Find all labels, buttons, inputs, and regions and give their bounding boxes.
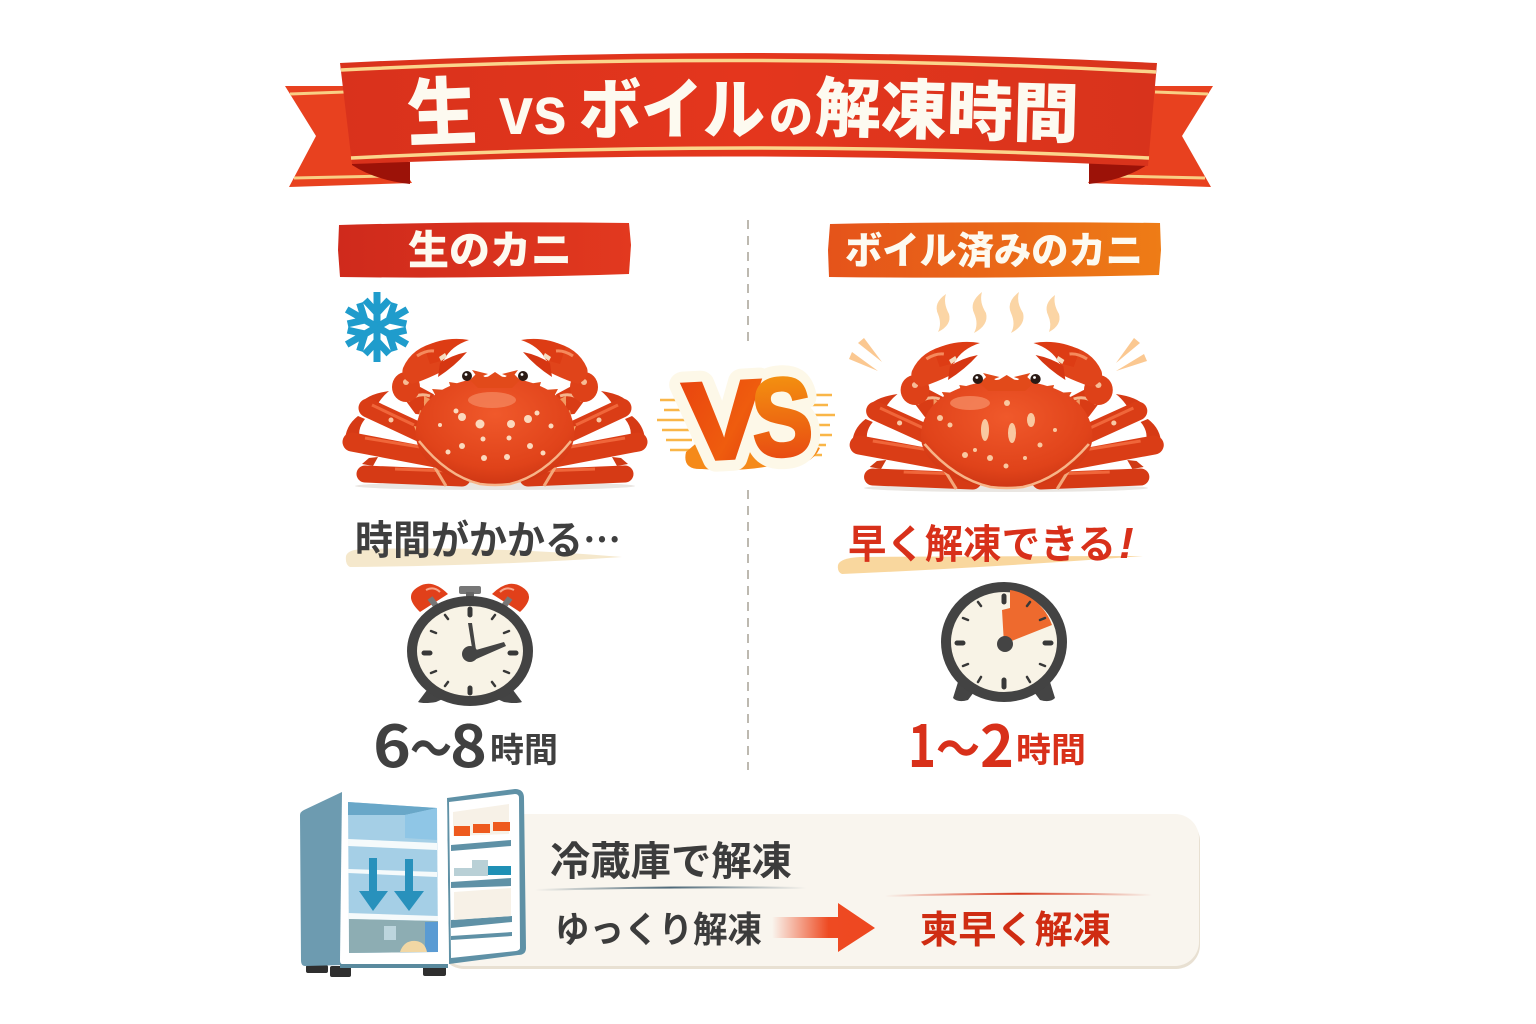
icon: heat rays [849,338,1147,371]
heading: 冷蔵庫で解凍 [550,829,792,887]
fast label: 柬早く解凍 [920,899,1111,954]
boiled shell speckles [937,396,1057,468]
ribbon folds [352,162,1147,184]
title text: 解凍時間 [814,56,1080,156]
time: 1-2 hours: 時間 [1016,723,1086,772]
title text: 生 [405,53,479,162]
title text: ボイル [579,57,765,153]
time: 1-2 hours [908,700,1086,784]
time: 6-8 hours: 時間 [490,723,558,772]
icon: snowflake [341,292,413,362]
caption: fast: 早く解凍できる [848,512,1116,570]
title text: vs [499,73,567,149]
label: raw crab: 生のカニ [408,218,572,276]
time: 6-8 hours: 6 [373,700,411,784]
label: raw crab [338,218,631,278]
icon: steam [937,292,1060,333]
icon: fast clock [946,587,1062,701]
label: boiled crab: ボイル済みのカニ [845,220,1143,275]
time: 6-8 hours: 8 [450,700,487,784]
caption: slow: 時間がかかる… [355,508,621,566]
time: 6-8 hours [373,700,558,784]
raw crab illustration [345,339,645,490]
VS badge: V [681,357,765,484]
title ribbon [285,53,1213,187]
title text [405,53,1080,162]
arrow [772,903,875,952]
main ribbon band [340,53,1157,166]
fridge interior [348,802,438,953]
fridge front frame [340,793,449,964]
boiled crab illustration [852,342,1161,492]
icon: open refrigerator [300,789,526,977]
caption: fast: ! [1119,519,1134,568]
cold air arrows [359,858,424,911]
time: 1-2 hours: 〜 [936,710,980,782]
left ribbon tail [285,86,412,187]
title text: の [769,81,813,145]
VS badge: S [749,355,815,481]
fridge body side [300,792,345,966]
time: 1-2 hours: 1 [908,700,936,784]
VS badge: V [681,357,765,484]
slow label: ゆっくり解凍 [555,901,762,953]
VS badge: S [749,355,815,481]
panel: refrigerator thawing [440,814,1200,969]
VS badge [657,355,835,484]
center divider [747,220,749,770]
right ribbon tail [1088,86,1213,187]
door shelves [453,804,509,836]
time: 6-8 hours: 〜 [410,710,452,782]
speed lines [657,395,835,455]
icon: alarm clock [411,584,529,703]
fridge feet [306,965,446,977]
time: 1-2 hours: 2 [980,700,1014,784]
open door [447,789,526,964]
